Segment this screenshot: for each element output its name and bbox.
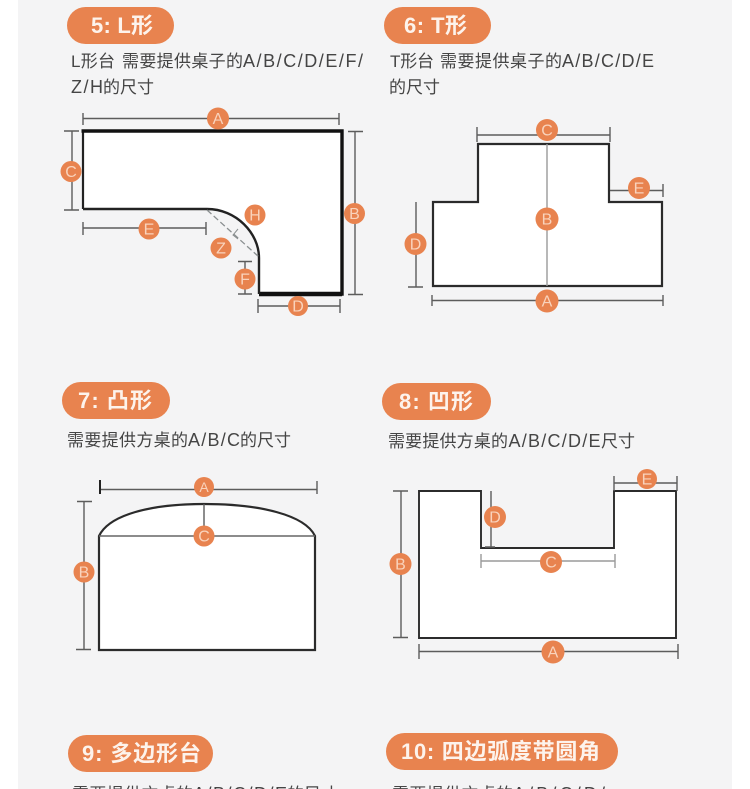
description: T shape: 的尺寸: [389, 78, 440, 97]
heading: 5 L shape: [67, 7, 174, 44]
dimension D: [258, 296, 340, 316]
badge Z: Z: [216, 240, 226, 258]
heading: 6 T shape: [384, 7, 491, 44]
heading: 8 concave shape: [382, 383, 491, 420]
dimension D: D: [489, 510, 501, 526]
dimension A: A: [542, 294, 553, 310]
description: L shape: 的尺寸: [103, 78, 154, 97]
description: T shape: [389, 51, 654, 97]
dimension D: [484, 491, 506, 547]
description: convex shape: [67, 430, 291, 450]
dimension A: A: [199, 479, 209, 495]
dimension A: A: [548, 644, 559, 662]
dimension B: B: [79, 564, 89, 582]
dimension E: E: [642, 472, 652, 488]
dimension C: [99, 504, 315, 546]
description: T shape: 需要提供桌子的: [440, 52, 562, 71]
badge H: [244, 204, 266, 226]
dimension C: C: [545, 554, 557, 572]
dimension E: E: [144, 222, 154, 238]
description: concave shape: A/B/C/D/E: [508, 431, 600, 451]
dimension C: [60, 131, 82, 210]
dimension C: C: [541, 122, 553, 140]
panel: polygon table: [68, 735, 337, 789]
dimension B: B: [395, 556, 406, 574]
description: concave shape: 尺寸: [601, 432, 635, 451]
heading: 8 concave shape: 8: 凹形: [399, 389, 473, 414]
panel: convex shape: [62, 382, 317, 650]
dimension E: [83, 218, 206, 240]
description: L shape: 需要提供桌子的: [122, 52, 243, 71]
heading: 7 convex shape: 7: 凸形: [78, 388, 152, 413]
dimension B: [536, 144, 558, 286]
dimension B: B: [542, 212, 552, 228]
heading: 10 four-side arc with rounded corners: 10: 四边弧度带圆角: [401, 739, 600, 764]
dimension B: [390, 491, 412, 638]
dimension A: [100, 477, 317, 497]
dimension D: [404, 202, 426, 287]
dimension A: [83, 108, 339, 130]
description: T shape: T形台: [390, 52, 434, 71]
panel: four-side arc table: [386, 733, 618, 789]
description: concave shape: [388, 431, 635, 451]
panel: T shape: [384, 7, 663, 312]
dimension E: E: [634, 180, 644, 198]
heading: 7 convex shape: [62, 382, 170, 419]
panel: L shape: [60, 7, 365, 316]
description: convex shape: 需要提供方桌的: [67, 431, 188, 450]
description: L shape: [71, 51, 363, 97]
badge Z: [210, 238, 232, 258]
dimension B: B: [349, 206, 360, 223]
dimension E: [614, 469, 677, 491]
heading: 5 L shape: 5: L形: [91, 13, 153, 38]
dimension F: [234, 261, 256, 294]
chord Z dashed line: [207, 210, 259, 257]
dimension B: [74, 501, 94, 650]
description: L shape: L形台: [71, 52, 115, 71]
heading: 6 T shape: 6: T形: [404, 13, 467, 38]
dimension A: [419, 640, 678, 664]
description: concave shape: 需要提供方桌的: [388, 432, 508, 451]
concave table outline: [419, 491, 676, 638]
L-shaped table outline: [82, 131, 342, 294]
heading: 9 polygon table: 9: 多边形台: [82, 741, 201, 766]
heading: 10 four-side arc with rounded corners: [386, 733, 618, 770]
dimension C: C: [198, 528, 210, 546]
dimension B: [344, 131, 365, 294]
dimension A: [432, 290, 663, 312]
description: convex shape: A/B/C: [188, 430, 240, 450]
description: convex shape: 的尺寸: [240, 431, 291, 450]
badge H: H: [249, 208, 261, 224]
dimension E: [610, 177, 663, 199]
dimension F: F: [240, 272, 250, 288]
description: polygon table, cropped: [72, 784, 337, 789]
dimension A: A: [213, 111, 224, 128]
dimension C: [477, 119, 610, 142]
convex table outline: [99, 504, 315, 650]
description: T shape: A/B/C/D/E: [562, 51, 654, 71]
dimension D: D: [292, 298, 304, 316]
description: four-side arc table, cropped: [392, 784, 605, 789]
description: L shape: Z/H: [71, 77, 103, 97]
dimension C: [481, 551, 615, 573]
description: L shape: A/B/C/D/E/F/: [243, 51, 363, 71]
dimension D: D: [410, 236, 421, 254]
T-shaped table outline: [433, 144, 662, 286]
panel: concave shape: [382, 383, 678, 664]
dimension C: C: [65, 164, 77, 181]
heading: 9 polygon table: [68, 735, 213, 772]
